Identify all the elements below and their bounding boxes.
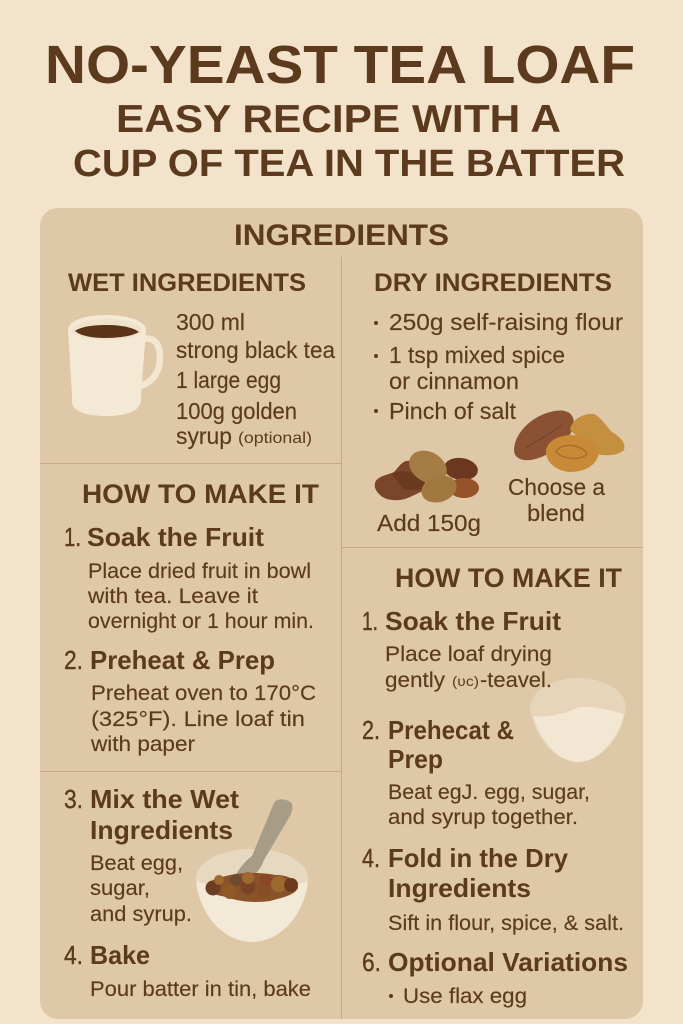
wet ingredients list: 300 ml (176, 309, 245, 335)
label: choose a blend: Choose a (508, 474, 605, 500)
panel: dry ingredients: DRY INGREDIENTS (374, 269, 612, 297)
wet ingredients list: 100g golden (176, 398, 297, 424)
step 3 mix: Ingredients (90, 815, 233, 845)
step 3 mix: Beat egg, (90, 851, 183, 875)
step 4 bake (64, 940, 311, 1001)
panel: how to make it right: HOW TO MAKE IT (395, 563, 622, 593)
wet ingredients list: syrup (176, 423, 232, 449)
panel: how to make it right (362, 563, 628, 1008)
icon: flour bowl (530, 678, 626, 762)
step 1 soak: overnight or 1 hour min. (88, 609, 314, 633)
icon: blended dried fruit (514, 410, 624, 472)
step 6 variations: Optional Variations (388, 947, 628, 977)
step 3 mix: Mix the Wet (90, 784, 239, 814)
step 1 soak: gently (385, 668, 445, 692)
step 1 soak: (ʋc) (452, 673, 479, 689)
dry ingredients list: 1 tsp mixed spice (389, 342, 565, 368)
step 2 prep (362, 715, 590, 829)
title: EASY RECIPE WITH A (116, 98, 561, 141)
panel: how to make it left (64, 479, 320, 1001)
step 3 mix (64, 784, 239, 926)
step 1 soak: Place loaf drying (385, 642, 552, 666)
wet ingredients list: strong black tea (176, 337, 335, 363)
step 1 soak: Soak the Fruit (87, 522, 264, 552)
step 3 mix: and syrup. (90, 902, 192, 926)
panel: wet ingredients (68, 269, 335, 449)
step 6 variations: 6. (362, 947, 381, 977)
step 2 preheat: 2. (64, 645, 83, 675)
step 4 fold: Ingredients (388, 873, 531, 903)
step 3 mix: 3. (64, 784, 83, 814)
step 3 mix: sugar, (90, 876, 150, 900)
step 2 prep: 2. (362, 715, 380, 745)
step 6 variations: Use flax egg (403, 984, 527, 1008)
dry ingredients list: or cinnamon (389, 368, 519, 394)
panel: wet ingredients: WET INGREDIENTS (68, 269, 306, 297)
step 2 preheat: (325°F). Line loaf tin (91, 707, 305, 731)
step 2 preheat: Preheat & Prep (90, 645, 275, 675)
step 6 variations (362, 947, 628, 1008)
heading: ingredients: INGREDIENTS (234, 219, 449, 252)
label: choose a blend: blend (527, 500, 585, 526)
dry ingredients list (374, 309, 623, 424)
step 1 soak: 1. (362, 606, 378, 636)
label: choose a blend (508, 474, 605, 526)
step 4 bake: Bake (90, 940, 150, 970)
step 4 bake: Pour batter in tin, bake (90, 977, 311, 1001)
step 1 soak: 1. (64, 522, 81, 552)
step 2 preheat (64, 645, 316, 756)
step 4 fold: 4. (362, 843, 380, 873)
title: CUP OF TEA IN THE BATTER (73, 143, 625, 185)
step 2 prep: Beat egJ. egg, sugar, (388, 780, 590, 804)
panel: recipe card (40, 208, 643, 1019)
dry ingredients list: 250g self-raising flour (389, 309, 623, 335)
step 1 soak (64, 522, 314, 633)
icon: mug of tea (68, 315, 160, 416)
step 2 prep: Prehecat & (388, 715, 514, 745)
step 4 fold (362, 843, 624, 935)
wet ingredients list: (optional) (238, 430, 312, 447)
dry ingredients list: Pinch of salt (389, 398, 517, 424)
step 1 soak (362, 606, 561, 692)
step 2 preheat: with paper (90, 732, 195, 756)
step 1 soak: Place dried fruit in bowl (88, 559, 311, 583)
step 2 preheat: Preheat oven to 170°C (91, 681, 316, 705)
icon: dried fruit pile (375, 444, 479, 507)
step 1 soak: with tea. Leave it (87, 584, 258, 608)
step 1 soak: Soak the Fruit (385, 606, 561, 636)
panel: how to make it left: HOW TO MAKE IT (82, 479, 320, 509)
label: add 150g: Add 150g (377, 510, 481, 536)
wet ingredients list: 1 large egg (176, 367, 281, 393)
step 1 soak: -teavel. (480, 668, 552, 692)
title: NO-YEAST TEA LOAF (45, 35, 635, 95)
wet ingredients list (176, 309, 335, 449)
step 2 prep: and syrup together. (388, 805, 578, 829)
step 4 bake: 4. (64, 940, 83, 970)
step 4 fold: Fold in the Dry (388, 843, 569, 873)
step 4 fold: Sift in flour, spice, & salt. (388, 911, 624, 935)
step 2 prep: Prep (388, 744, 443, 774)
icon: bowl with fruit and spoon (196, 799, 308, 942)
title (45, 35, 635, 185)
panel: dry ingredients (374, 269, 624, 536)
